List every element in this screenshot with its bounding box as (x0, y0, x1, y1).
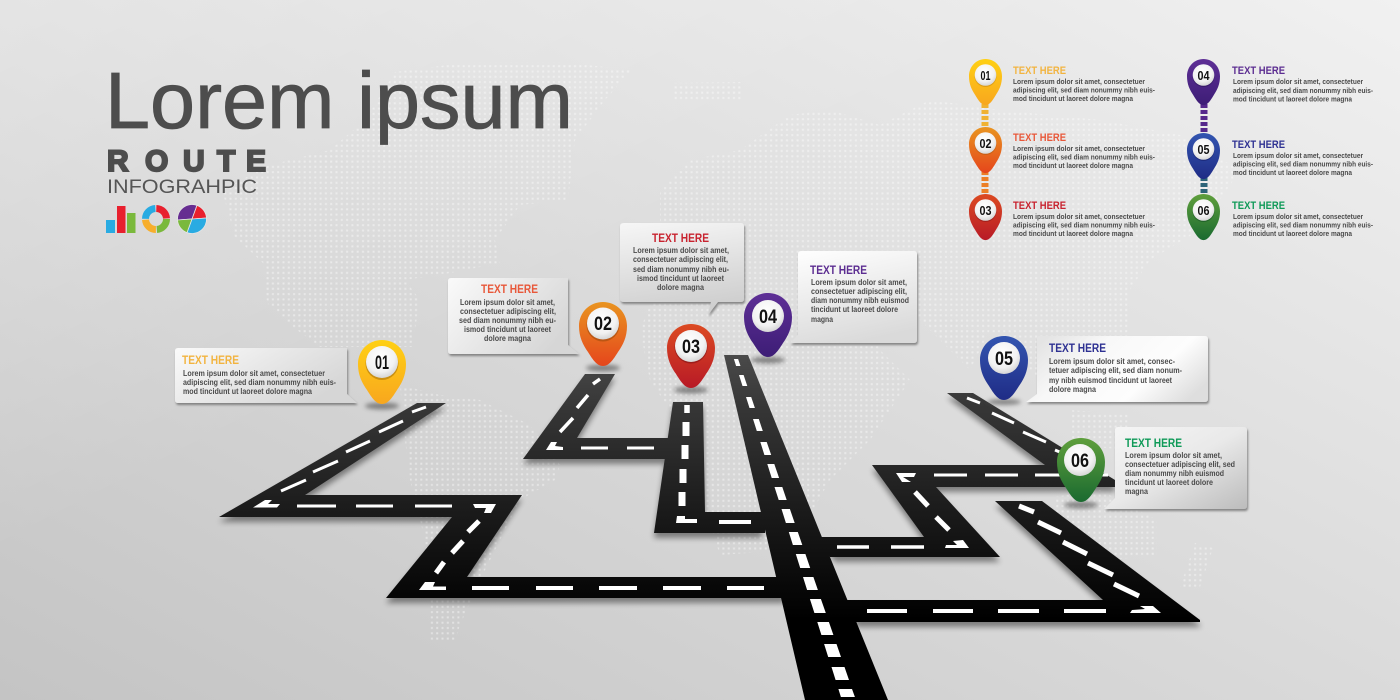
legend pin 05: 05 (1198, 142, 1210, 157)
legend pin 06: 06 (1198, 203, 1210, 218)
legend text 02: TEXT HERE (1013, 132, 1066, 144)
main road (724, 355, 888, 700)
legend text 05: Lorem ipsum dolor sit amet, consectetuer (1233, 151, 1363, 160)
legend pin 01 (969, 59, 1002, 105)
legend text 06: mod tincidunt ut laoreet dolore magna (1233, 229, 1353, 238)
map pin 01: 01 (375, 353, 389, 374)
legend pin 05 (1187, 133, 1220, 179)
callout 01 box (175, 348, 357, 403)
legend text 01 (1013, 65, 1155, 103)
road segment 3 (654, 402, 765, 533)
callout 03 title: TEXT HERE (652, 231, 709, 245)
legend pin 06 (1187, 194, 1220, 240)
map pin 06 (1057, 438, 1105, 502)
legend text 06: TEXT HERE (1232, 200, 1285, 212)
subtitle: route: ROUTE (107, 145, 266, 178)
legend pin 04 (1187, 59, 1220, 105)
road segment 6 (840, 501, 1200, 622)
lane markings (253, 359, 1161, 697)
callout 03 body: ismod tincidunt ut laoreet (637, 274, 724, 283)
legend text 05: mod tincidunt ut laoreet dolore magna (1233, 168, 1353, 177)
legend pin 03 (969, 194, 1002, 240)
callout 04 (790, 251, 917, 343)
legend text 02 (1013, 132, 1155, 170)
map pin 02: 02 (594, 314, 612, 335)
legend connectors (985, 104, 1204, 195)
callout 06 box (1104, 427, 1247, 509)
callout 06 body: magna (1125, 487, 1148, 496)
callout 03 (620, 223, 744, 315)
callout 01 body: Lorem ipsum dolor sit amet, consectetuer (183, 369, 325, 378)
map pin 04: 04 (759, 307, 777, 328)
legend text 01: Lorem ipsum dolor sit amet, consectetuer (1013, 77, 1145, 86)
legend text 03: TEXT HERE (1013, 200, 1066, 212)
legend text 06: adipiscing elit, sed diam nonummy nibh euis- (1233, 220, 1373, 230)
legend text 01: mod tincidunt ut laoreet dolore magna (1013, 94, 1134, 103)
legend pin 04: 04 (1198, 68, 1210, 83)
callout 06 (1104, 427, 1247, 509)
callout 01 body: mod tincidunt ut laoreet dolore magna (183, 387, 312, 396)
legend text 04: TEXT HERE (1232, 65, 1285, 77)
callout 04 box (790, 251, 917, 343)
legend pin 02: 02 (980, 136, 992, 151)
icon: donut chart (146, 208, 166, 230)
legend text 05: adipiscing elit, sed diam nonummy nibh euis- (1233, 160, 1373, 168)
callout 04 body (811, 278, 909, 324)
callout 06 body: diam nonummy nibh euismod (1125, 469, 1224, 478)
callout 02 (448, 278, 579, 354)
map pin 03 (667, 324, 715, 388)
callout 05 title: TEXT HERE (1049, 341, 1106, 355)
callout 05 body (1049, 357, 1182, 394)
title: Lorem ipsum (105, 56, 573, 145)
dotted world map (222, 62, 1240, 642)
callout 03 body (633, 246, 729, 292)
callout 01 title: TEXT HERE (182, 353, 239, 367)
legend item 04 (1187, 59, 1373, 105)
legend text 05 (1232, 139, 1373, 177)
road shadow (219, 379, 1200, 627)
legend text 02: mod tincidunt ut laoreet dolore magna (1013, 161, 1134, 170)
map pin 03: 03 (682, 337, 700, 358)
callout 01 body (183, 369, 336, 396)
legend item 02 (969, 127, 1155, 173)
callout 06 title: TEXT HERE (1125, 436, 1182, 450)
callout 02 body: Lorem ipsum dolor sit amet, (460, 298, 555, 307)
legend text 06: Lorem ipsum dolor sit amet, consectetuer (1233, 212, 1363, 221)
icon: bar chart (106, 206, 136, 233)
callout 03 body: consectetuer adipiscing elit, (633, 255, 728, 264)
callout 01 (175, 348, 357, 403)
callout 02 body: ismod tincidunt ut laoreet (464, 325, 551, 334)
legend item 03 (969, 194, 1155, 240)
callout 04 body: consectetuer adipiscing elit, (811, 287, 907, 296)
legend text 04: Lorem ipsum dolor sit amet, consectetuer (1233, 77, 1363, 86)
map pin 05 (980, 336, 1028, 400)
callout 02 body: sed diam nonummy nibh eu- (459, 316, 556, 325)
legend text 01: TEXT HERE (1013, 65, 1066, 77)
legend text 04 (1232, 65, 1373, 104)
legend item 06 (1187, 194, 1373, 240)
legend pin 01: 01 (980, 68, 990, 83)
callout 04 body: Lorem ipsum dolor sit amet, (811, 278, 907, 287)
callout 03 box (620, 223, 744, 315)
callout 05 body: Lorem ipsum dolor sit amet, consec- (1049, 357, 1175, 366)
map pin 01 (358, 340, 406, 404)
callout 04 title: TEXT HERE (810, 263, 867, 277)
legend text 02: adipiscing elit, sed diam nonummy nibh euis- (1013, 152, 1155, 162)
road network (219, 355, 1200, 700)
legend text 04: adipiscing elit, sed diam nonummy nibh euis- (1233, 86, 1373, 95)
icon: pie chart (177, 204, 207, 234)
callout 05 box (1026, 336, 1208, 402)
callout 05 body: tetuer adipiscing elit, sed diam nonum- (1049, 366, 1182, 375)
callout 05 (1026, 336, 1208, 402)
callout 05 body: dolore magna (1049, 385, 1096, 394)
legend text 03: Lorem ipsum dolor sit amet, consectetuer (1013, 212, 1145, 221)
callout 03 body: sed diam nonummy nibh eu- (633, 265, 729, 274)
callout 02 body (459, 298, 556, 343)
map pin 04 (744, 293, 792, 357)
road segment 5 (815, 393, 1115, 557)
callout 06 body (1125, 451, 1235, 496)
legend text 03: mod tincidunt ut laoreet dolore magna (1013, 229, 1134, 238)
road segment 1 (219, 403, 785, 598)
callout 04 body: tincidunt ut laoreet dolore (811, 305, 898, 314)
legend text 03: adipiscing elit, sed diam nonummy nibh euis- (1013, 220, 1155, 230)
callout 03 body: Lorem ipsum dolor sit amet, (633, 246, 729, 255)
callout 02 body: consectetuer adipiscing elit, (460, 307, 556, 316)
legend text 02: Lorem ipsum dolor sit amet, consectetuer (1013, 144, 1145, 153)
callout 04 body: diam nonummy nibh euismod (811, 296, 909, 305)
callout 06 body: Lorem ipsum dolor sit amet, (1125, 451, 1222, 460)
map pin 02 (579, 302, 627, 366)
callout 02 title: TEXT HERE (481, 282, 538, 296)
legend text 05: TEXT HERE (1232, 139, 1285, 151)
callout 03 body: dolore magna (657, 283, 704, 292)
callout 06 body: consectetuer adipiscing elit, sed (1125, 460, 1235, 469)
legend pin 03: 03 (980, 203, 992, 218)
pin shadows (365, 356, 1098, 508)
callout 05 body: my nibh euismod tincidunt ut laoreet (1049, 376, 1172, 385)
legend text 06 (1232, 200, 1373, 238)
map pin 05: 05 (995, 349, 1013, 370)
callout 02 body: dolore magna (484, 334, 531, 343)
callout 04 body: magna (811, 315, 833, 324)
callout 01 body: adipiscing elit, sed diam nonummy nibh euis- (183, 378, 336, 387)
legend item 01 (969, 59, 1155, 105)
legend pin 02 (969, 127, 1002, 173)
map pin 06: 06 (1071, 451, 1089, 472)
callout 06 body: tincidunt ut laoreet dolore (1125, 478, 1213, 487)
legend text 01: adipiscing elit, sed diam nonummy nibh euis- (1013, 86, 1155, 94)
subtitle: infographic: INFOGRAHPIC (107, 177, 257, 198)
callout 02 box (448, 278, 579, 354)
legend item 05 (1187, 133, 1373, 179)
road segment 2 (523, 374, 670, 459)
legend text 03 (1013, 200, 1155, 238)
legend text 04: mod tincidunt ut laoreet dolore magna (1233, 94, 1353, 104)
